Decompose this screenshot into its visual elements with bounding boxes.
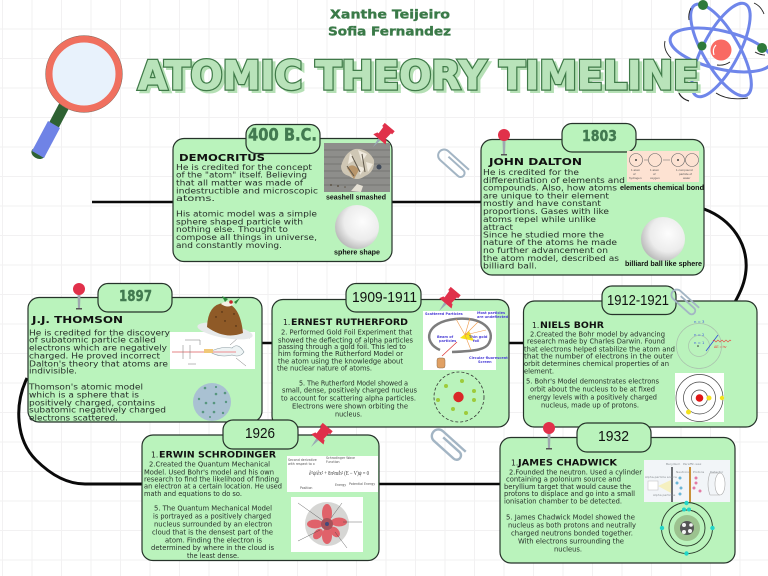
year tab: 1897: 1897	[119, 287, 152, 305]
panel: ernest rutherford	[272, 284, 509, 427]
text: Schrodinger biography: nucleus surrounded by an electron	[154, 520, 272, 529]
year tab: 1909-1911: 1909-1911	[352, 289, 417, 306]
text: Thomson biography: charged. He proved incorrect	[29, 351, 161, 361]
image: chemical bond diagram: 1 compound	[676, 168, 693, 172]
panel: j.j. thomson	[28, 283, 262, 422]
text: Dalton biography: differentiation of elements and	[483, 175, 625, 185]
text: Thomson biography: of subatomic particle called	[29, 335, 156, 345]
image: neutron experiment diagram: Beryllium	[666, 462, 680, 466]
text: Democritus biography: He is credited for the concept	[176, 162, 313, 172]
text: Schrodinger biography: atom. Finding the electron is	[165, 535, 262, 544]
icon: magnifying glass	[29, 36, 122, 161]
text: Rutherford biography	[277, 328, 417, 419]
authors: Xanthe Teijeiro	[330, 8, 450, 22]
text: Dalton biography: mostly and have constant	[483, 198, 602, 208]
image: gold foil experiment diagram: Most particles	[477, 311, 505, 315]
text: Bohr biography: research made by Charles Darwin. Found	[527, 337, 665, 346]
image: neutron experiment diagram: Alpha particles	[653, 493, 676, 497]
heading: Erwin Schrodinger: 1.	[151, 451, 158, 460]
icon: red pin	[433, 286, 462, 316]
text: Chadwick biography: nucleus as both protons and neutrally	[508, 521, 637, 530]
text: Democritus biography: nothing else. Thought to	[176, 224, 288, 234]
paperclip	[669, 287, 699, 316]
image: chemical bond diagram: water	[683, 176, 690, 180]
icon: round pin	[498, 129, 510, 156]
text: Rutherford biography: showed the deflecting of alpha particles	[278, 335, 413, 344]
image: schrodinger equation: with respect to x	[288, 462, 315, 466]
text: Thomson biography: electrons scattered.	[29, 412, 118, 422]
panel: erwin schrodinger	[142, 420, 379, 560]
panel: james chadwick	[500, 422, 735, 563]
text: Schrodinger biography: research to find the likelihood of finding	[144, 475, 279, 484]
heading: James Chadwick: 1.	[511, 459, 518, 468]
text: Dalton biography: no further advancement on	[483, 245, 608, 255]
text: Rutherford biography: 2. Performed Gold Foil Experiment that	[281, 328, 412, 337]
image: schrodinger equation: Potential Energy	[349, 482, 375, 486]
image: gold foil experiment diagram: are undeflected	[477, 315, 509, 319]
image: bohr energy level diagram: n = 3	[694, 319, 705, 324]
authors	[328, 8, 451, 38]
image: rutherford atom model	[434, 372, 484, 422]
text: Democritus biography: and constantly moving.	[176, 240, 282, 250]
image: gold foil experiment diagram: particles	[439, 339, 456, 343]
text: Schrodinger biography: is portrayed as a positively charged	[153, 512, 271, 521]
text: Democritus biography: His atomic model was a simple	[176, 209, 317, 219]
year tab: 1932	[577, 423, 651, 452]
timeline connector	[19, 202, 746, 484]
image: schrodinger equation: Energy	[335, 483, 346, 487]
image: bohr energy level diagram: ΔE = hν	[714, 345, 727, 349]
text: Bohr biography: element.	[524, 367, 554, 376]
text: Schrodinger biography: an electron at a certain location. He used	[144, 482, 282, 491]
text: Dalton biography: He is credited for the	[483, 167, 579, 177]
image: cathode ray tube diagram	[170, 332, 255, 369]
heading: J.J. Thomson: J.J. THOMSON	[31, 315, 123, 326]
image: chemical bond diagram: 1 atom	[650, 168, 660, 172]
image: chemical bond diagram	[627, 151, 699, 182]
text: Democritus biography: that all matter was made of	[176, 178, 304, 188]
panel: democritus	[173, 122, 396, 261]
text: Thomson biography	[28, 328, 170, 422]
caption: seashell smashed: seashell smashed	[326, 194, 386, 202]
heading: James Chadwick: JAMES CHADWICK	[517, 459, 617, 469]
image: sphere	[335, 205, 379, 249]
image: neutron experiment diagram: Paraffin wax	[683, 462, 702, 466]
text: Dalton biography: billiard ball.	[483, 261, 537, 271]
year tab: 400 B.C.	[246, 124, 320, 154]
image: neutron experiment diagram: Neutrons	[676, 470, 690, 474]
image: bohr energy level diagram	[676, 319, 731, 368]
text: Schrodinger biography: math and equations to do so.	[144, 489, 242, 498]
icon: atom	[665, 0, 768, 104]
paperclip	[429, 427, 466, 462]
icon: round pin	[73, 283, 85, 310]
text: Thomson biography: positively charged, contains	[29, 397, 155, 407]
image: schrodinger equation: ∂²ψ/∂x² + 8π²m/h² (E − V)ψ = 0	[309, 470, 369, 477]
text: Thomson biography: indivisible.	[29, 366, 77, 376]
image: schrodinger equation: Second derivative	[288, 458, 317, 462]
image: gold foil experiment diagram: foil	[473, 339, 479, 343]
icon: round pin	[543, 422, 555, 450]
text: Bohr biography: 5. Bohr's Model demonstrates electrons	[526, 377, 659, 386]
heading: John Dalton: JOHN DALTON	[488, 157, 582, 168]
text: Schrodinger biography: 2.Created the Quantum Mechanical	[149, 460, 270, 469]
text: Bohr biography: orbit about the nucleus to be at fixed	[530, 385, 655, 394]
image: chemical bond diagram: of	[653, 172, 656, 176]
image: gold foil experiment diagram: Circular fluorescent	[469, 356, 508, 360]
image: plum pudding atom model	[193, 383, 231, 421]
heading: Erwin Schrodinger: ERWIN SCHRODINGER	[159, 451, 276, 461]
image: schrodinger equation: Position	[300, 486, 312, 490]
text: Dalton biography: the atom model, described as	[483, 253, 619, 263]
text: Democritus biography: compose all things in universe,	[176, 232, 317, 242]
text: Thomson biography: Dalton's theory that atoms are	[29, 358, 168, 368]
text: Dalton biography: atoms repel while unlike	[483, 214, 596, 224]
image: chemical bond diagram: particle of	[679, 172, 692, 176]
authors: Sofia Fernandez	[328, 24, 451, 38]
text: Schrodinger biography: 5. The Quantum Mechanical Model	[154, 504, 272, 513]
heading: Niels Bohr: 1.	[532, 321, 539, 330]
image: chemical bond diagram: 1 atom	[631, 168, 641, 172]
icon: red pin	[367, 122, 396, 152]
title: ATOMIC THEORY TIMELINE	[141, 56, 702, 102]
year tab: 1932: 1932	[598, 428, 629, 445]
image: neutron experiment diagram	[644, 460, 730, 502]
text: Chadwick biography: charged neutrons bonded together.	[511, 529, 633, 538]
text: Thomson biography: Thomson's atomic model	[28, 382, 143, 392]
text: Bohr biography: energy levels with a positively charged	[528, 393, 657, 402]
image: plum pudding	[196, 296, 254, 343]
text: Dalton biography	[483, 167, 625, 271]
text: Rutherford biography: Electrons were shown orbiting the	[292, 402, 408, 411]
image: gold foil experiment diagram: Scattered Particles	[425, 312, 463, 316]
text: Chadwick biography: nucleus.	[554, 545, 582, 554]
text: Thomson biography: subatomic negatively charged	[29, 405, 166, 415]
year tab: 1926	[223, 420, 298, 449]
text: Chadwick biography: protons to displace and go into a small	[504, 489, 635, 498]
text: Rutherford biography: the nuclear nature of atoms.	[277, 363, 372, 372]
text: Rutherford biography: nucleus.	[335, 410, 362, 419]
image: bohr energy level diagram: n = 1	[694, 340, 705, 345]
text: Thomson biography: He is credited for the discovery	[29, 328, 170, 338]
text: Chadwick biography: 2.Founded the neutron. Used a cylinder	[509, 468, 643, 477]
image: smashed seashell	[324, 143, 390, 192]
title: ATOMIC THEORY TIMELINE	[138, 54, 699, 99]
text: Dalton biography: nature of the atoms he made	[483, 237, 617, 247]
heading: Democritus: DEMOCRITUS	[179, 153, 265, 164]
text: Bohr biography: orbit determines chemical properties of an	[524, 359, 669, 368]
year tab: 1912-1921: 1912-1921	[607, 292, 669, 309]
text: Democritus biography: sphere shaped particle with	[176, 217, 303, 227]
text: Schrodinger biography: determined by where in the cloud is	[151, 543, 274, 552]
text: Chadwick biography: With electrons surrounding the	[518, 537, 624, 546]
text: Bohr biography: nucleus, made up of protons.	[541, 401, 639, 410]
text: Chadwick biography	[504, 468, 643, 554]
text: Rutherford biography: 5. The Rutherford Model showed a	[299, 378, 408, 387]
image: gold foil experiment diagram: Screen	[478, 360, 492, 364]
text: Chadwick biography: ionisation chamber to be detected.	[504, 497, 622, 506]
text: Democritus biography: atoms.	[176, 193, 215, 203]
text: Dalton biography: attract	[483, 222, 514, 232]
text: Chadwick biography: containing a polonium source and	[506, 475, 621, 484]
text: Rutherford biography: him forming the Rutherford Model or	[278, 349, 404, 358]
text: Dalton biography: are unique to their element	[483, 191, 610, 201]
text: Chadwick biography: beryllium target that would cause the	[504, 482, 631, 491]
image: gold foil experiment diagram: Beam of	[437, 335, 454, 339]
heading: Ernest Rutherford: ERNEST RUTHERFORD	[291, 318, 408, 328]
heading: Niels Bohr: NIELS BOHR	[540, 321, 604, 331]
image: neutron experiment diagram: Protons	[693, 470, 705, 474]
text: Dalton biography: proportions. Gases with like	[483, 206, 609, 216]
image: orbital model	[291, 497, 363, 552]
text: Schrodinger biography: cloud that is the densest part of the	[152, 528, 273, 537]
year tab: 1803: 1803	[582, 127, 617, 145]
text: Rutherford biography: passing through a gold foil. This led to	[278, 342, 406, 351]
text: Democritus biography: indestructible and microscopic	[176, 186, 318, 196]
image: chemical bond diagram: of	[633, 172, 636, 176]
image: neutron experiment diagram: Detector	[710, 470, 724, 474]
text: Thomson biography: which is a sphere that is	[29, 389, 139, 399]
text: Rutherford biography: the atom using the knowledge about	[278, 356, 403, 365]
paperclip	[436, 147, 469, 179]
image: bohr atom model	[675, 373, 724, 422]
year tab: 1926: 1926	[245, 425, 275, 442]
image: neutron experiment diagram: Alpha-particle source	[645, 475, 677, 479]
text: Bohr biography: that the number of electrons in the outer	[524, 352, 674, 361]
image: schrodinger equation	[287, 456, 378, 492]
year tab: 1909-1911	[346, 284, 421, 312]
icon: red pin	[305, 422, 334, 452]
year tab: 1912-1921	[602, 286, 676, 314]
text: Bohr biography: 2.Created the Bohr model by advancing	[530, 330, 665, 339]
text: Chadwick biography: 5. James Chadwick Model showed the	[506, 513, 635, 522]
title: ATOMIC THEORY TIMELINE	[138, 54, 699, 99]
image: gold foil experiment diagram: Thin gold	[469, 335, 488, 339]
image: billiard ball sphere	[641, 217, 685, 261]
text: Dalton biography: Since he studied more the	[483, 230, 604, 240]
caption: billiard ball like sphere: billiard ball like sphere	[625, 261, 702, 268]
text: Dalton biography: compounds. Also, how atoms	[483, 183, 617, 193]
caption: elements chemical bond: elements chemical bond	[620, 185, 704, 192]
heading: Ernest Rutherford: 1.	[283, 318, 290, 327]
image: chemical bond diagram: hydrogen	[629, 176, 642, 180]
text: Bohr biography	[524, 330, 675, 410]
year tab: 400 B.C.: 400 B.C.	[248, 126, 317, 144]
panel: john dalton	[481, 124, 704, 275]
text: Schrodinger biography: the least dense.	[187, 551, 239, 560]
text: Democritus biography: of the "atom" itself. Believing	[176, 170, 307, 180]
caption: sphere shape: sphere shape	[334, 250, 380, 256]
panel: niels bohr	[524, 286, 757, 427]
text: Rutherford biography: small, dense, positively charged nucleus	[282, 386, 417, 395]
image: schrodinger equation: Schrodinger Wave	[326, 456, 355, 460]
text: Schrodinger biography	[144, 460, 282, 560]
text: Democritus biography	[176, 162, 318, 250]
year tab: 1803	[562, 124, 636, 152]
year tab: 1897	[98, 284, 172, 312]
text: Thomson biography: electrons which are negatively	[29, 343, 167, 353]
text: Schrodinger biography: Model. Used Bohr's model and his own	[144, 467, 274, 476]
image: schrodinger equation: Function	[326, 460, 340, 464]
text: Bohr biography: that electrons helped stabilize the atom and	[524, 345, 675, 354]
image: bohr energy level diagram: n = 2	[694, 332, 705, 337]
text: Rutherford biography: to account for scattering alpha particles.	[281, 394, 416, 403]
image: chadwick atom model	[660, 501, 715, 556]
image: chemical bond diagram: oxygen	[650, 176, 660, 180]
image: gold foil experiment diagram	[423, 311, 509, 370]
